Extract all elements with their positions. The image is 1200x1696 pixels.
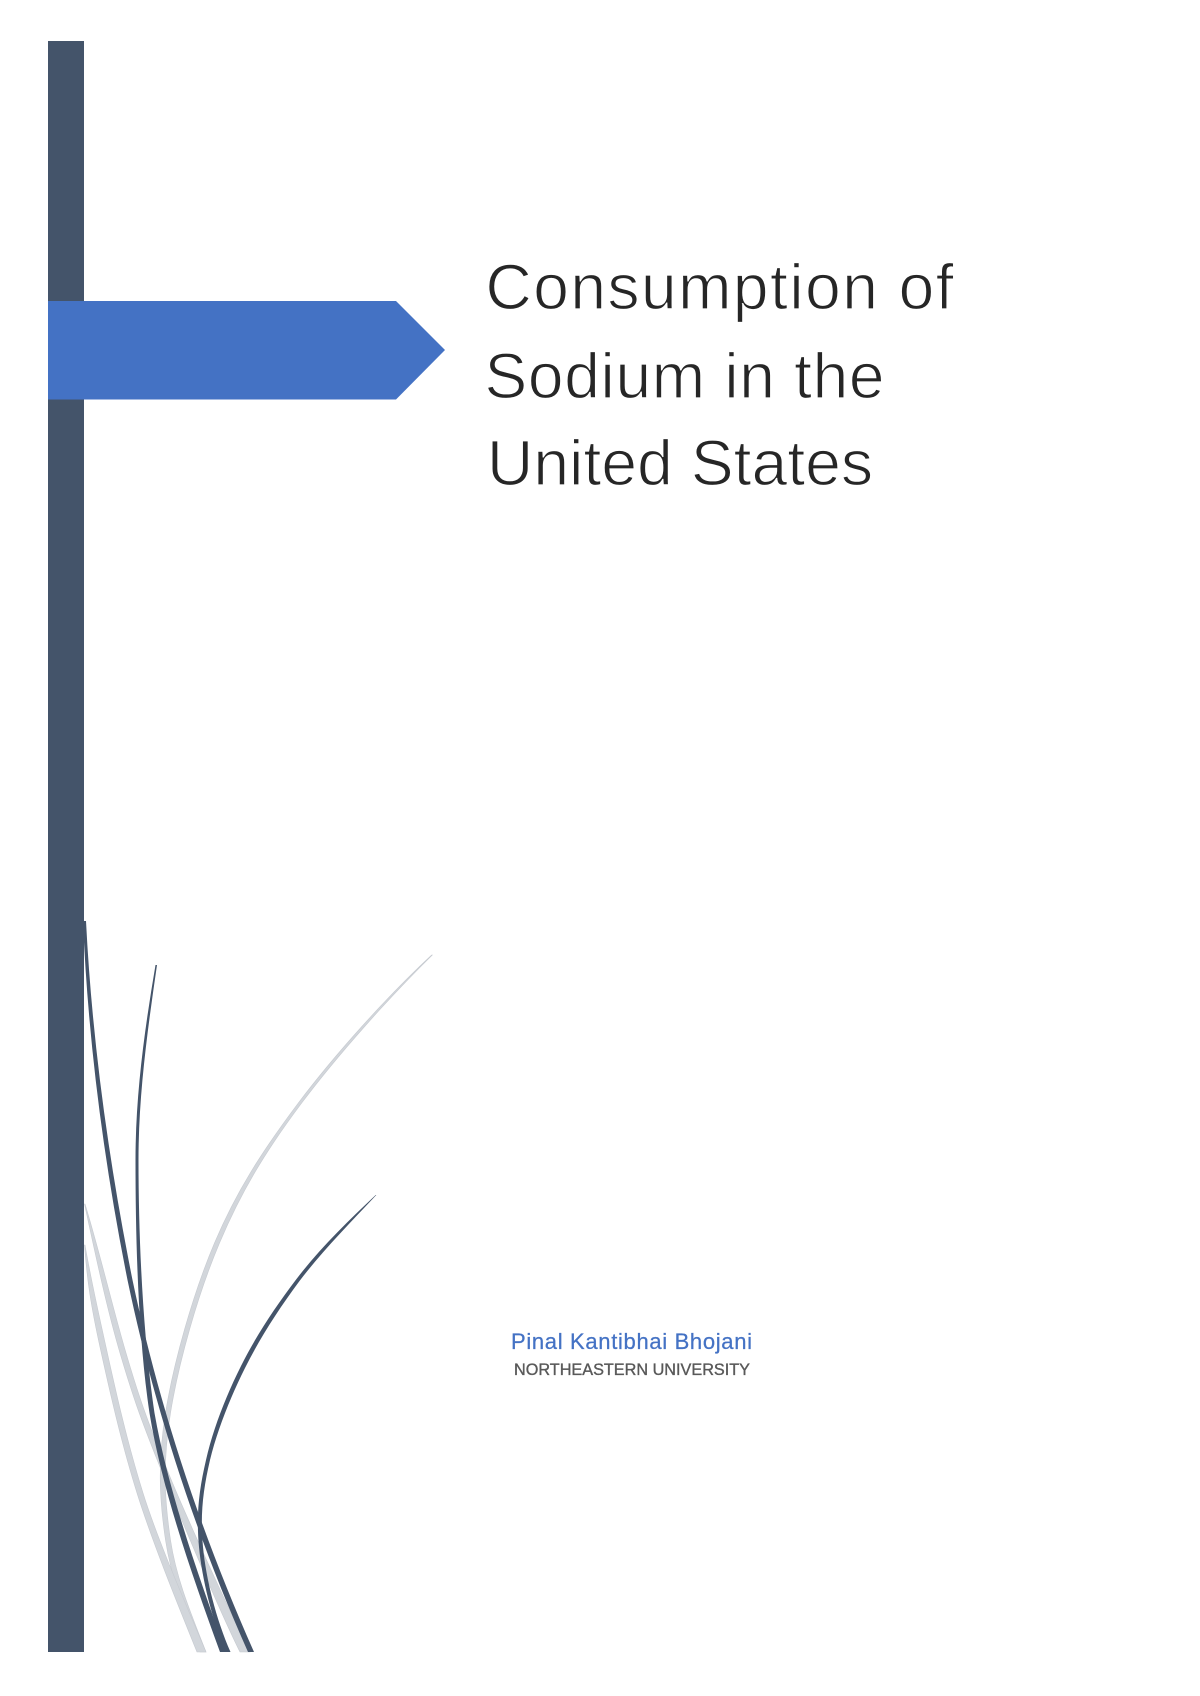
blue pentagon arrow [48,301,445,400]
light curves [84,955,432,1652]
title: United States [487,427,873,499]
dark curves [83,921,376,1652]
author name: Pinal Kantibhai Bhojani [511,1329,752,1354]
decorative curves [83,921,432,1652]
university name: NORTHEASTERN UNIVERSITY [514,1361,750,1379]
title: Consumption of [486,251,954,323]
title: Sodium in the [484,340,884,412]
left vertical bar [48,41,84,1652]
title [484,251,954,499]
